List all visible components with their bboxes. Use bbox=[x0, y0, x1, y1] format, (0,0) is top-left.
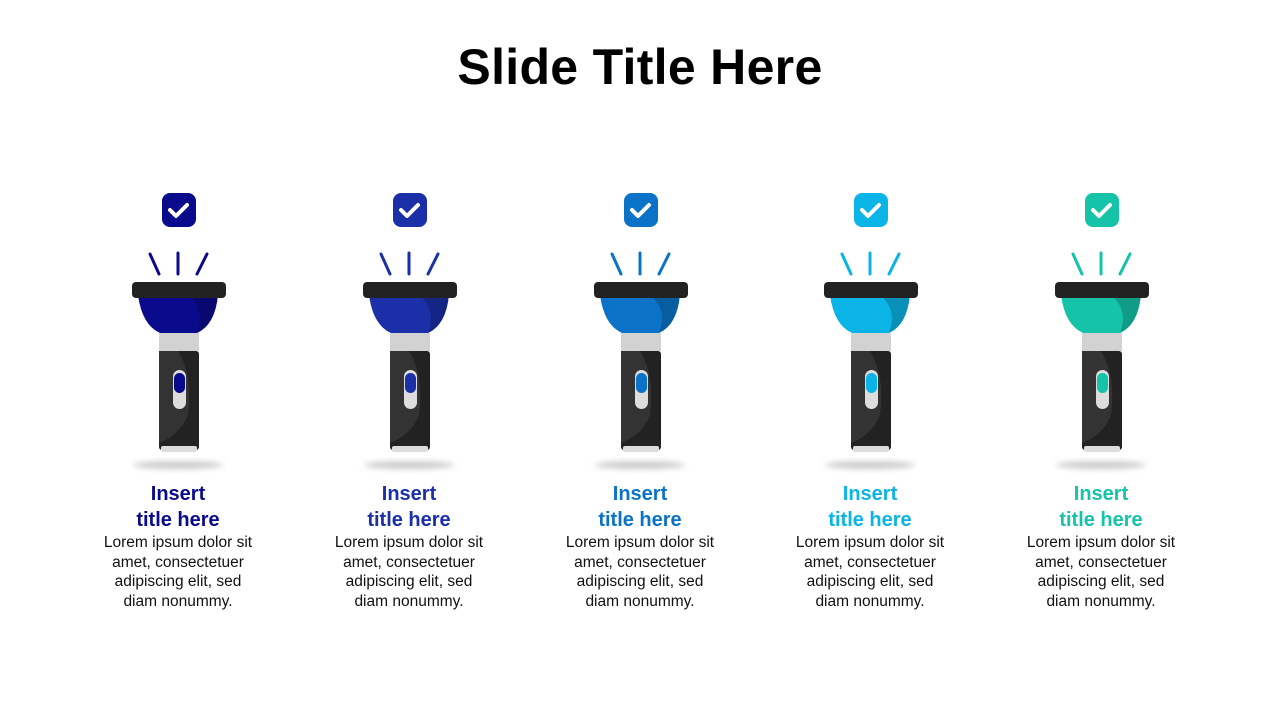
text: item 4: Lorem ipsum dolor sit amet, consectetuer adipiscing elit, sed diam nonummy. bbox=[796, 534, 944, 610]
title: Slide Title Here bbox=[457, 39, 823, 95]
text: item 1: Lorem ipsum dolor sit amet, consectetuer adipiscing elit, sed diam nonummy. bbox=[104, 534, 252, 610]
text: item 3: title here bbox=[598, 509, 682, 531]
text: item 3: Lorem ipsum dolor sit amet, consectetuer adipiscing elit, sed diam nonummy. bbox=[566, 534, 714, 610]
text: item 5: title here bbox=[1059, 509, 1143, 531]
text: item 2 bbox=[335, 483, 483, 610]
panel: item 3 bbox=[566, 193, 714, 610]
panel: item 5 bbox=[1027, 193, 1175, 610]
text: item 4: Insert bbox=[843, 483, 897, 505]
panel: item 1 bbox=[104, 193, 252, 610]
text: item 5 bbox=[1027, 483, 1175, 610]
icon: flashlight 5 bbox=[1055, 193, 1149, 472]
text: item 1: Insert bbox=[151, 483, 205, 505]
icon: flashlight 2 bbox=[363, 193, 457, 472]
text: item 2: title here bbox=[367, 509, 451, 531]
text: item 2: Insert bbox=[382, 483, 436, 505]
icon: flashlight 3 bbox=[594, 193, 688, 472]
text: item 1 bbox=[104, 483, 252, 610]
panel: item 2 bbox=[335, 193, 483, 610]
text: item 3: Insert bbox=[613, 483, 667, 505]
icon: flashlight 1 bbox=[132, 193, 226, 472]
panel: item 4 bbox=[796, 193, 944, 610]
icon: flashlight 4 bbox=[824, 193, 918, 472]
text: item 4: title here bbox=[828, 509, 912, 531]
text: item 2: Lorem ipsum dolor sit amet, consectetuer adipiscing elit, sed diam nonummy. bbox=[335, 534, 483, 610]
text: item 5: Lorem ipsum dolor sit amet, consectetuer adipiscing elit, sed diam nonummy. bbox=[1027, 534, 1175, 610]
text: item 4 bbox=[796, 483, 944, 610]
text: item 1: title here bbox=[136, 509, 220, 531]
text: item 3 bbox=[566, 483, 714, 610]
text: item 5: Insert bbox=[1074, 483, 1128, 505]
